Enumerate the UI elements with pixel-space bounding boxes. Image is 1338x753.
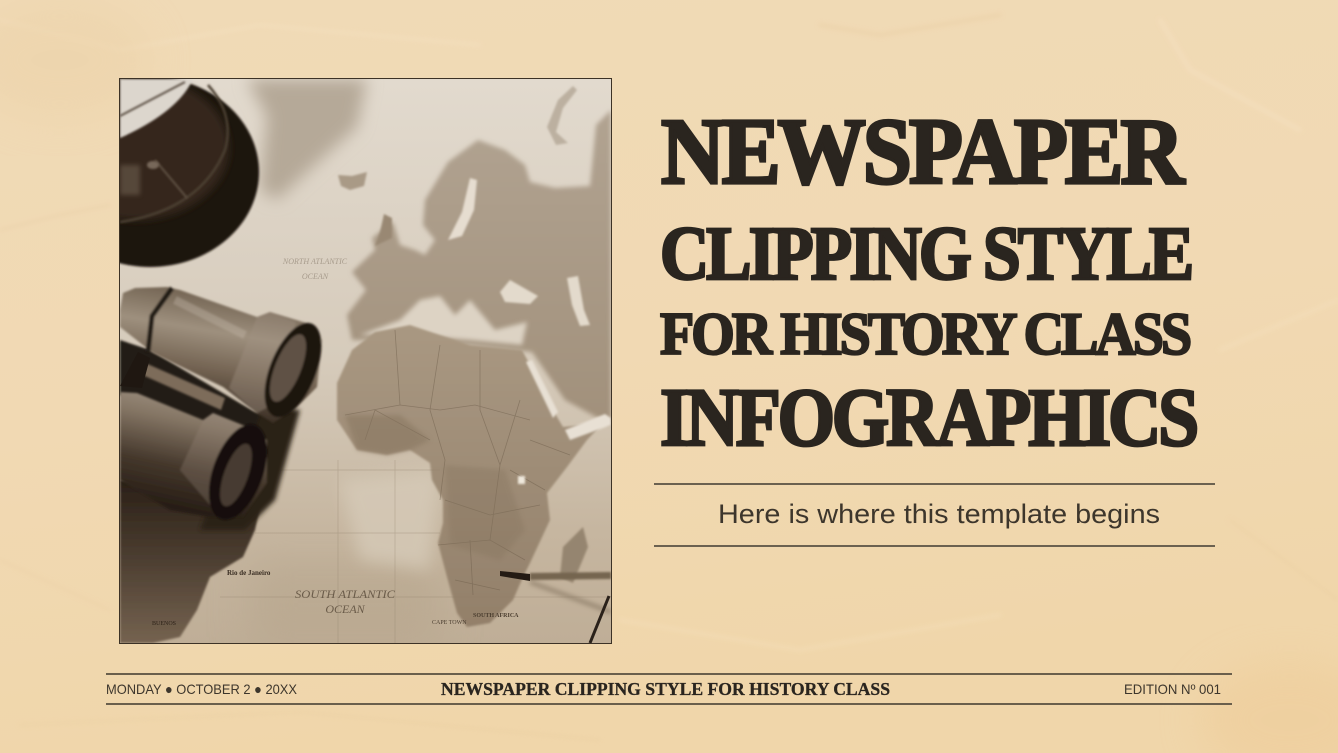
map labels <box>152 257 519 627</box>
compass glass highlight <box>120 79 193 138</box>
Africa country borders <box>345 330 570 595</box>
Madagascar <box>560 527 588 583</box>
binocular cast shadow <box>200 405 300 530</box>
footer bar <box>106 673 1232 705</box>
map labels: BUENOS <box>152 621 176 627</box>
map labels: SOUTH ATLANTIC <box>295 587 396 601</box>
Black Sea <box>500 280 538 304</box>
title block <box>660 100 1197 463</box>
footer edition: EDITION Nº 001 <box>1124 681 1221 697</box>
photo border <box>120 78 612 644</box>
Baltic Sea <box>448 178 477 240</box>
map labels: SOUTH AFRICA <box>473 613 519 619</box>
footer title: NEWSPAPER CLIPPING STYLE FOR HISTORY CLASS <box>441 679 890 699</box>
map labels: CAPE TOWN <box>432 620 467 626</box>
bridge tube <box>138 362 225 410</box>
pale water streak <box>345 475 436 572</box>
Iceland <box>338 172 367 190</box>
compass inner dial <box>120 79 230 221</box>
Africa <box>337 325 603 627</box>
Gulf of Aden <box>565 414 611 440</box>
Caspian Sea <box>567 276 590 326</box>
pen tip <box>530 572 611 580</box>
Lake Victoria <box>518 476 525 484</box>
map sea background <box>120 79 611 643</box>
South America <box>120 480 263 643</box>
photo: map with binoculars and compass <box>119 78 612 644</box>
binoculars <box>120 287 333 530</box>
map labels: Rio de Janeiro <box>227 569 271 577</box>
map labels: OCEAN <box>302 272 329 281</box>
Arctic island <box>547 86 577 145</box>
upper barrel <box>120 287 333 425</box>
UK <box>375 214 392 246</box>
title line: NEWSPAPER: NEWSPAPER <box>661 100 1185 204</box>
title line: FOR HISTORY CLASS: FOR HISTORY CLASS <box>660 300 1190 367</box>
Red Sea <box>526 360 558 418</box>
map labels: NORTH ATLANTIC <box>282 257 348 266</box>
Eurasia landmass <box>347 110 611 425</box>
lower barrel <box>120 390 268 520</box>
subtitle: Here is where this template begins <box>718 499 1160 529</box>
title line: INFOGRAPHICS: INFOGRAPHICS <box>660 371 1197 463</box>
Mediterranean Sea <box>360 296 527 345</box>
pen shadow <box>530 582 611 612</box>
Greenland <box>247 79 367 200</box>
map labels: OCEAN <box>325 602 366 616</box>
title line: CLIPPING STYLE: CLIPPING STYLE <box>660 212 1191 296</box>
graticule lines <box>220 460 611 643</box>
Central Africa darker detail <box>448 469 512 508</box>
West Africa darker detail <box>345 415 430 455</box>
compass dome <box>120 79 261 269</box>
footer date: MONDAY ● OCTOBER 2 ● 20XX <box>106 681 298 697</box>
warm tone in the South Atlantic <box>398 590 399 591</box>
pen on the corner <box>590 596 609 643</box>
compass detail <box>147 161 159 169</box>
bridge mount <box>120 360 148 386</box>
shadow between barrels <box>120 338 260 427</box>
